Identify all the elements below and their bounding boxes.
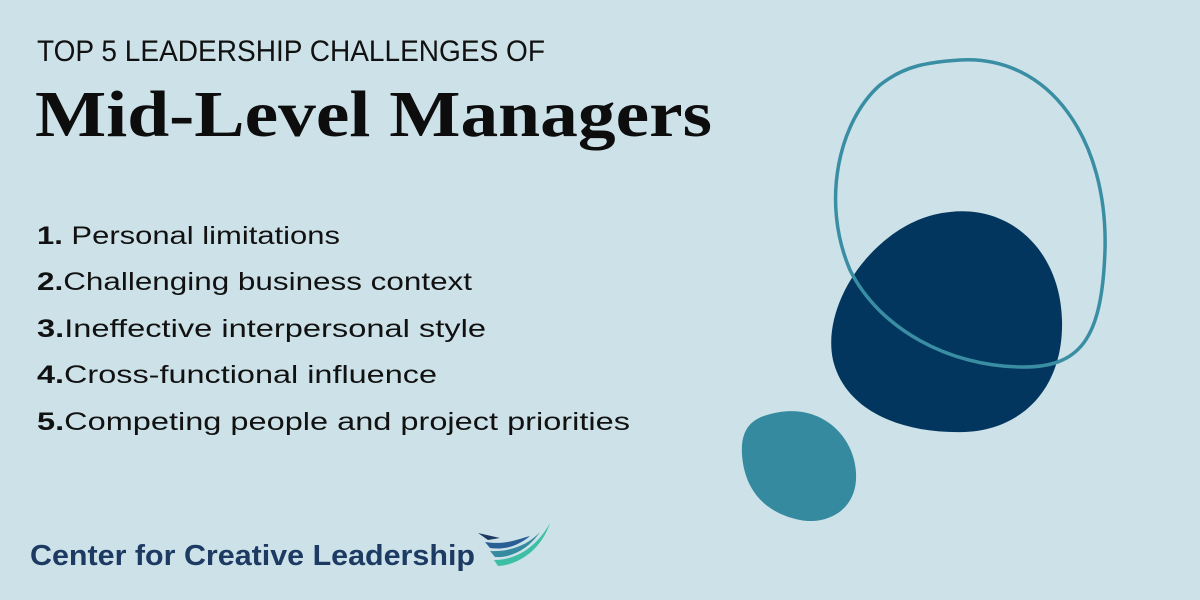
item 4: 4.Cross-functional influence — [37, 361, 437, 389]
shape: teal small blob — [742, 411, 856, 521]
item 1: 1. Personal limitations — [37, 222, 340, 250]
logo text: Center for Creative Leadership — [30, 540, 475, 572]
item 5: 5. Competing people and project priorities — [37, 408, 630, 436]
shape: dark navy blob — [831, 211, 1062, 432]
logo swoosh — [478, 533, 500, 540]
shape: outline ring — [836, 60, 1105, 367]
subtitle: TOP 5 LEADERSHIP CHALLENGES OF — [37, 35, 545, 68]
item 2: 2.Challenging business context — [37, 268, 472, 296]
list of challenges — [37, 222, 630, 436]
item 3: 3. Ineffective interpersonal style — [37, 315, 486, 343]
title: Mid-Level Managers — [35, 78, 712, 151]
logo — [30, 523, 550, 572]
